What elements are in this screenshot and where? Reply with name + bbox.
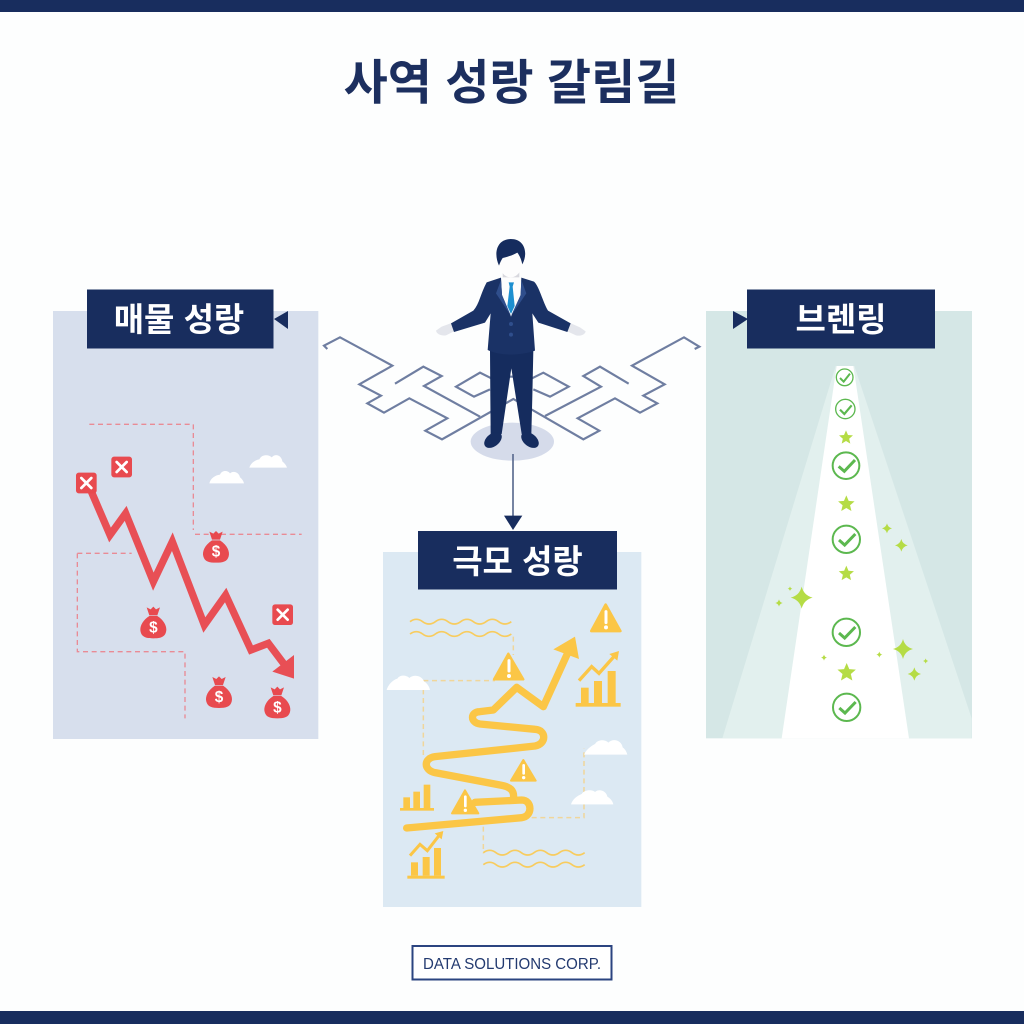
icon: money bag 4: $ [273, 699, 282, 716]
buttons [509, 322, 513, 326]
central figure at crossroads [324, 239, 699, 530]
label: branding [747, 290, 935, 348]
panel: scale growth [383, 552, 641, 907]
icon: money bag 3: $ [215, 689, 224, 706]
arrow: down [504, 454, 522, 530]
icon: warning 4 [452, 790, 478, 813]
icon: money bag 2 [140, 607, 166, 638]
wavy lines [410, 619, 585, 867]
icon: x mark 1 [111, 457, 132, 477]
businessman [436, 239, 586, 451]
arrow: right pointer [733, 311, 748, 329]
icon: bar chart top right [576, 651, 621, 707]
icon: x mark 2 [76, 473, 97, 493]
icon: check 4 [833, 526, 860, 553]
hair [496, 239, 525, 266]
icon: money bag 4 [264, 687, 290, 718]
footer: company name: DATA SOLUTIONS CORP. [423, 956, 601, 973]
label: scale growth [418, 531, 617, 590]
maze paths [324, 337, 699, 439]
light beam inner [782, 366, 909, 738]
label: scale growth: 극모 성랑 [452, 543, 583, 580]
arrow: left pointer [274, 311, 288, 329]
tie [507, 282, 515, 314]
title: 사역 성랑 갈림길 [344, 57, 679, 110]
icon: clouds [209, 455, 287, 483]
declining red arrow [91, 490, 294, 679]
icon: warning 3 [511, 760, 536, 781]
label: property growth [87, 290, 274, 348]
icon: clouds [387, 676, 627, 804]
label: property growth: 매물 성랑 [114, 301, 244, 338]
dashed guide lines [423, 637, 584, 853]
bottom bar [0, 1011, 1024, 1024]
top bar [0, 0, 1024, 12]
panel: property growth [53, 311, 318, 739]
icon: bar chart left [400, 785, 434, 811]
icon: stars [837, 430, 856, 680]
floor shadow [471, 423, 554, 461]
light beam outer [722, 366, 972, 738]
icon: money bag 1: $ [212, 544, 221, 561]
icon: check 6 [833, 694, 860, 721]
icon: x mark 3 [272, 604, 293, 625]
shirt [501, 277, 521, 316]
lapels [496, 280, 511, 316]
icon: warning 1 [494, 654, 523, 679]
jacket [451, 278, 571, 355]
head and neck [503, 272, 519, 285]
hands [436, 323, 586, 336]
icon: check 2 [836, 399, 855, 419]
icon: check 5 [833, 619, 860, 646]
shoes [481, 429, 505, 451]
icon: sparkles [775, 523, 928, 681]
icon: bar chart bottom left [407, 831, 445, 879]
icon: money bag 2: $ [149, 619, 158, 636]
icon: check 3 [833, 452, 859, 479]
icon: money bag 1 [203, 531, 229, 563]
icon: money bag 3 [206, 676, 232, 708]
label: branding: 브렌링 [795, 301, 887, 338]
dashed guide lines [77, 424, 302, 718]
panel: branding [706, 311, 972, 738]
footer: company name [412, 946, 612, 980]
winding yellow road arrow [407, 637, 579, 828]
icon: check 1 [836, 369, 853, 386]
icon: warning 2 [591, 605, 620, 631]
legs [490, 351, 533, 434]
